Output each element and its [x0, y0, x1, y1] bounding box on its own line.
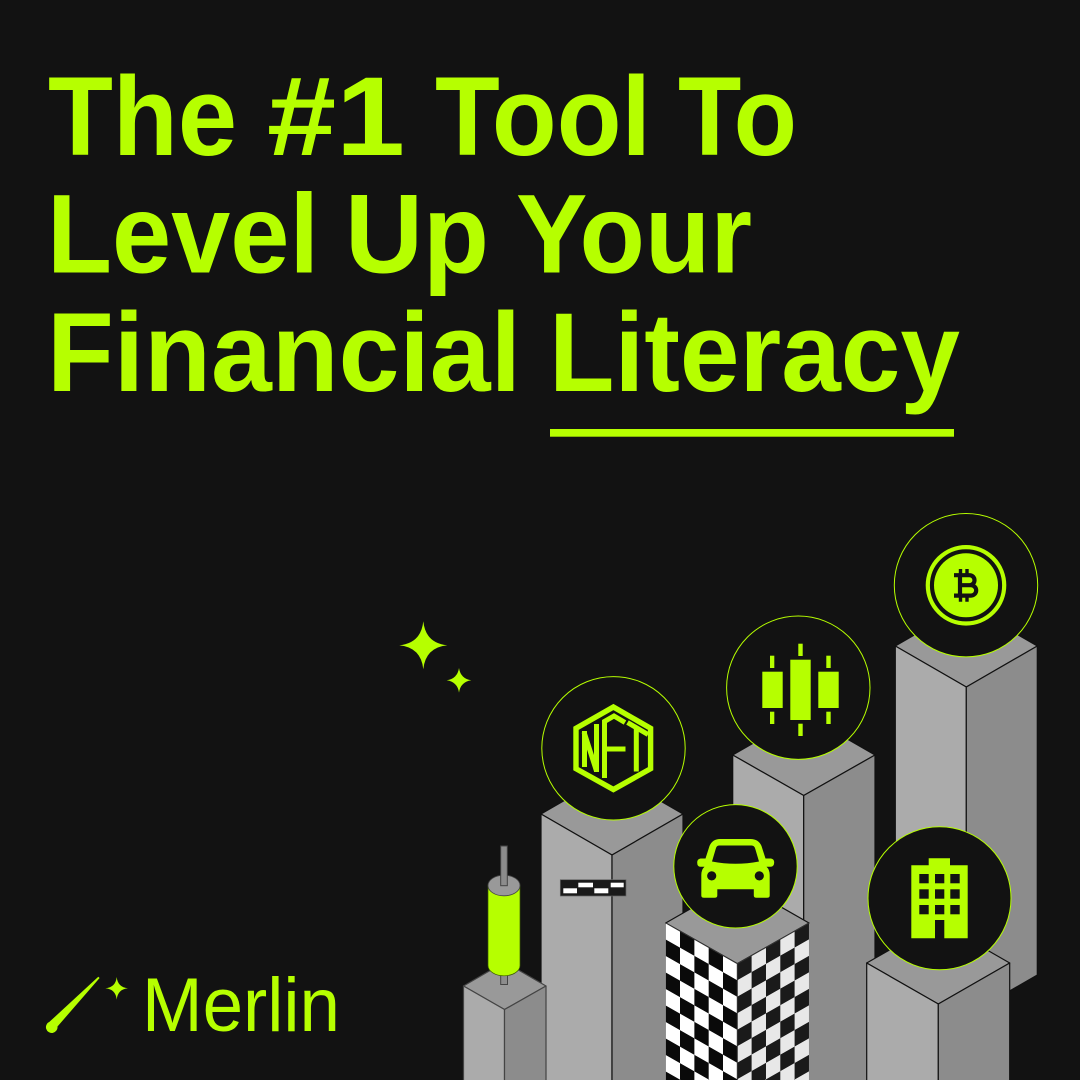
title: The — [48, 54, 237, 179]
front building: office — [867, 922, 1010, 1080]
tall building: bitcoin — [895, 605, 1037, 1016]
icon circle: NFT — [542, 677, 685, 820]
building sign — [560, 880, 626, 896]
title: To — [678, 54, 797, 179]
checkered building — [666, 882, 809, 1080]
building: NFT — [541, 773, 683, 1080]
icon circle: bitcoin — [894, 514, 1038, 657]
icon: wand sparkle — [105, 977, 128, 1000]
icon circle: candlesticks — [727, 616, 870, 759]
logo wordmark: Merlin — [142, 963, 340, 1048]
icon circle: car — [674, 805, 797, 928]
candle lower wick — [501, 970, 508, 984]
title: Your — [516, 172, 752, 297]
title: Financial — [47, 290, 521, 415]
candle upper wick — [501, 846, 507, 886]
title: Level — [47, 172, 319, 297]
title: Literacy — [549, 290, 960, 415]
title underline — [550, 429, 954, 437]
candle body — [488, 885, 520, 976]
title: #1 — [267, 54, 405, 179]
sparkles — [399, 621, 471, 693]
Merlin logo — [46, 963, 340, 1048]
title: Tool — [435, 54, 651, 179]
title — [47, 54, 960, 415]
candle top cap — [488, 875, 520, 896]
title: Up — [345, 172, 489, 297]
icon: magic wand — [46, 977, 100, 1033]
building: candlesticks — [733, 714, 875, 1080]
icon circle: office building — [868, 827, 1011, 970]
small building with candle — [464, 846, 546, 1080]
